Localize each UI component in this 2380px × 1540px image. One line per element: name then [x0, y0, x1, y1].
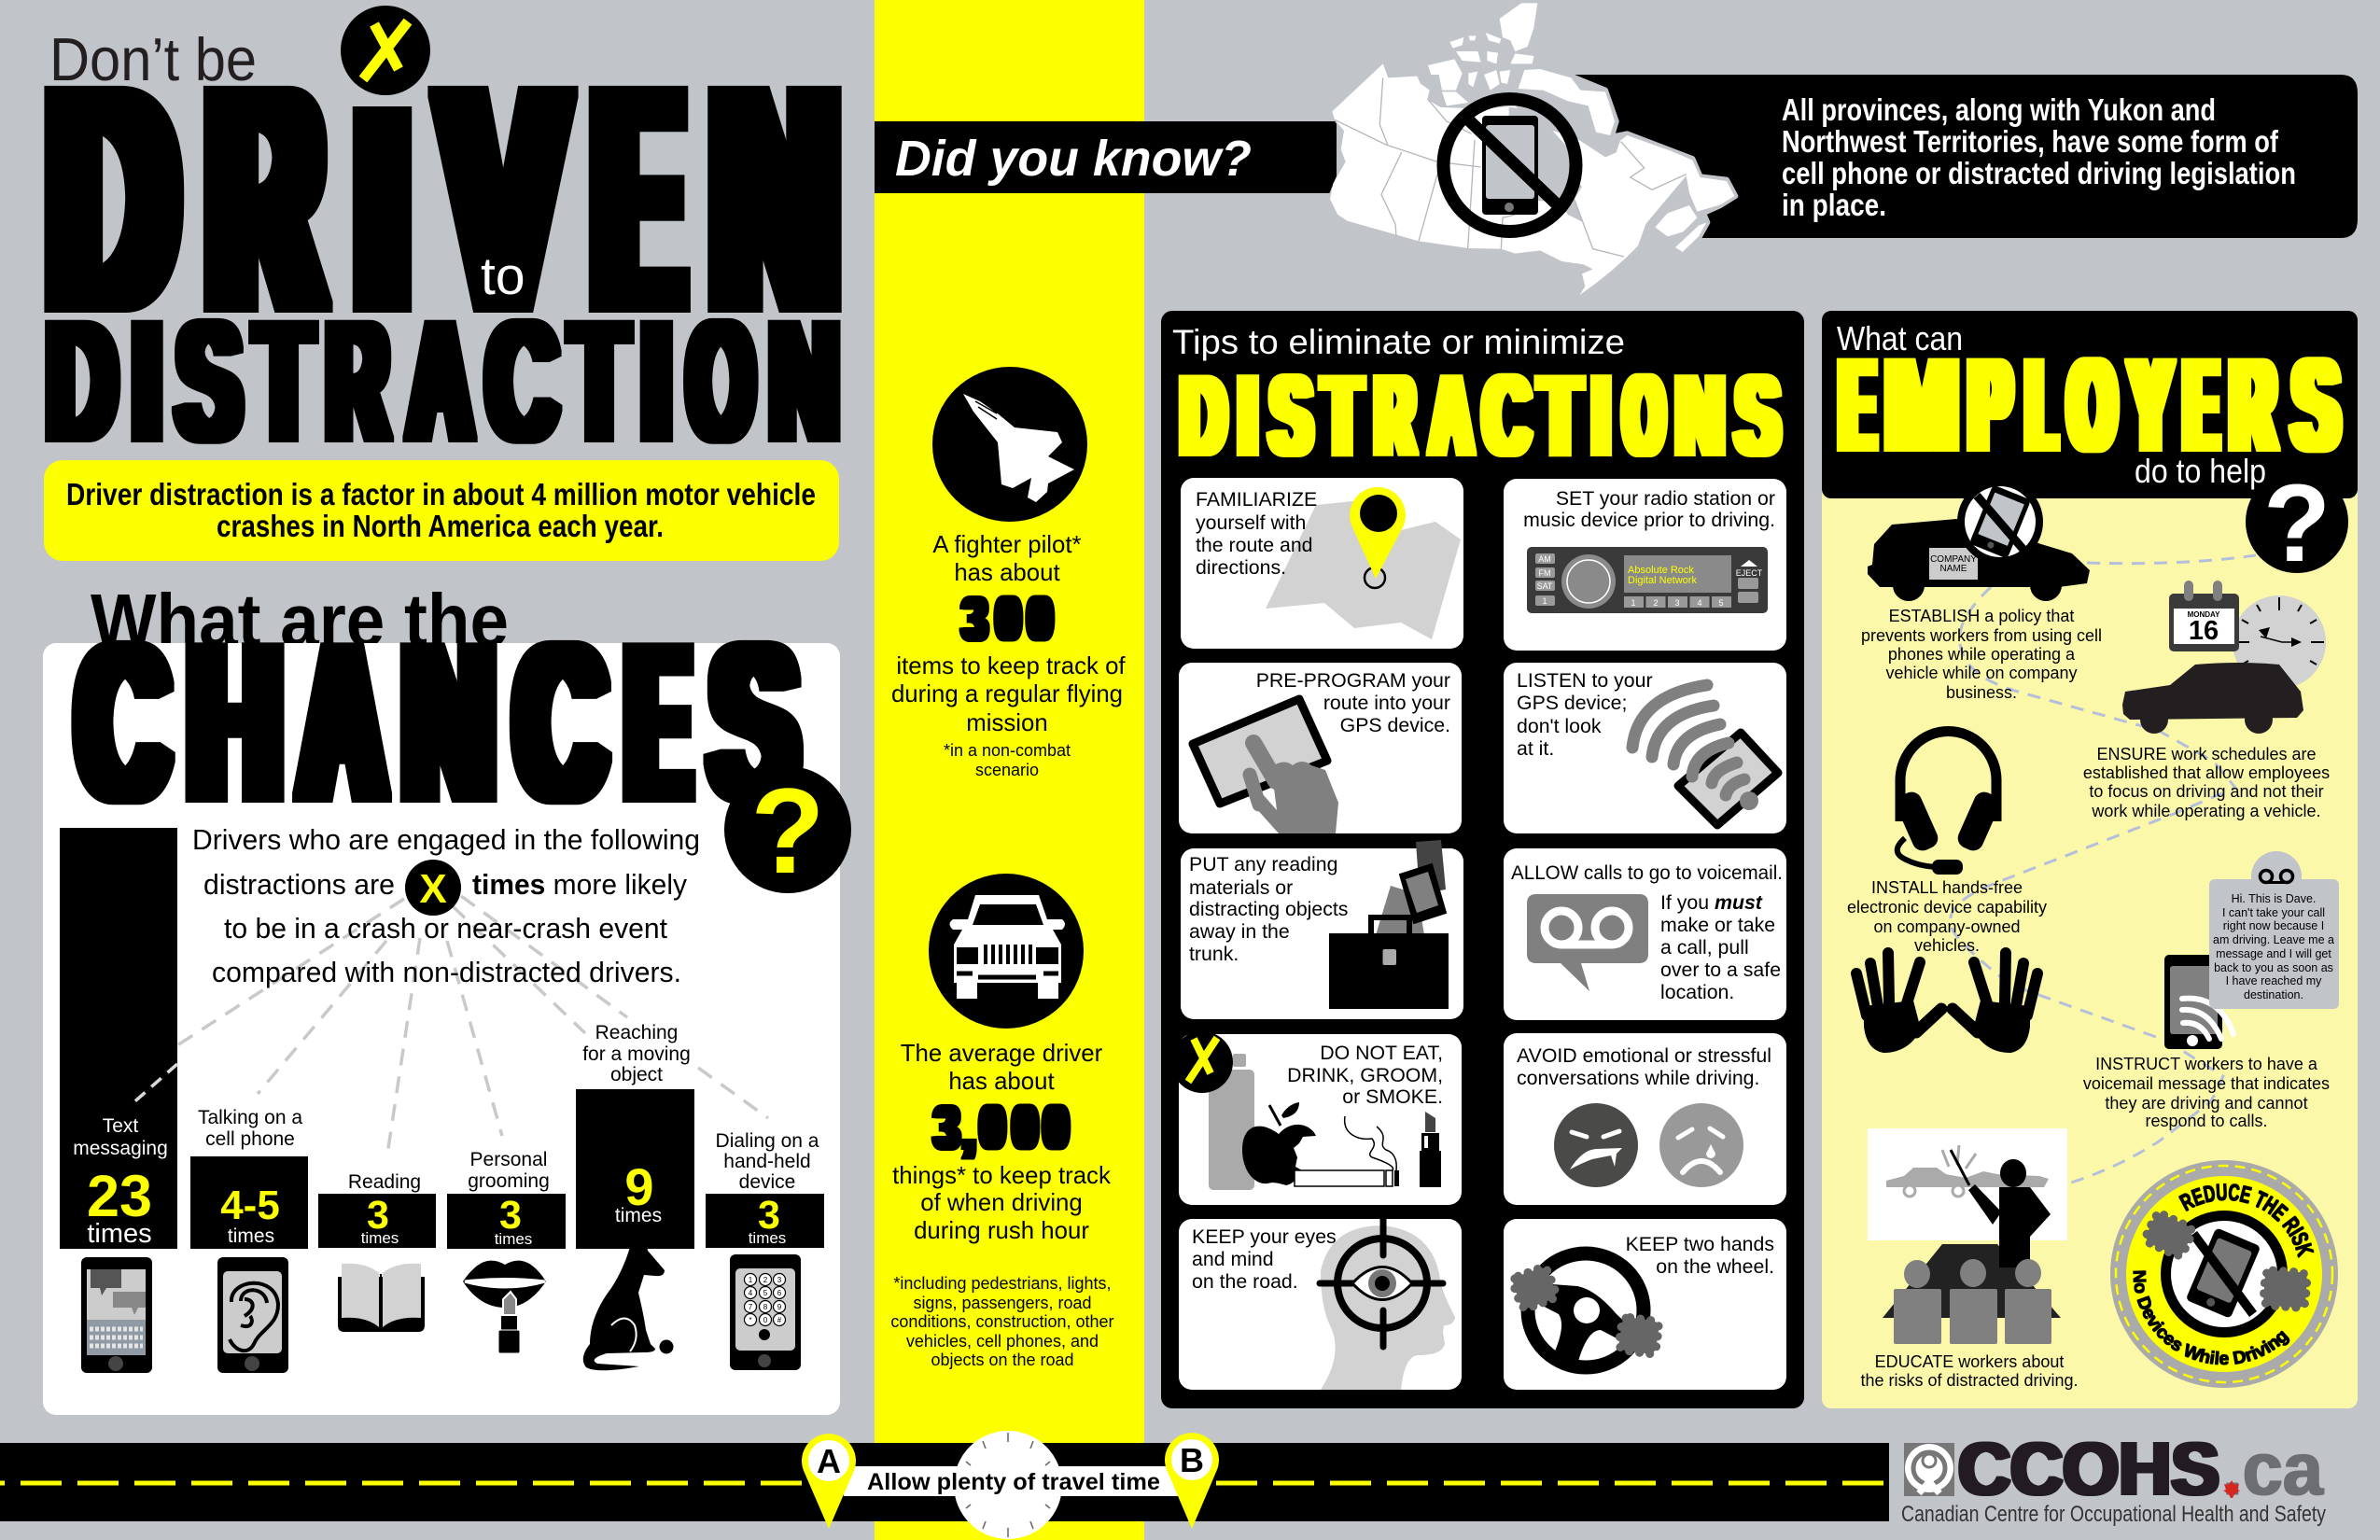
bar: dialing on a hand-held device	[716, 1130, 819, 1247]
icon: question circle: ?	[2263, 462, 2331, 585]
card: put reading materials away: distracting objects	[1189, 898, 1348, 920]
stat: average driver: 3	[934, 1092, 959, 1163]
icon: X multiplier: X	[419, 866, 447, 912]
heading: EMPLOYERS: L	[2028, 331, 2055, 478]
card: keep eyes: and mind	[1192, 1248, 1274, 1270]
title: DISTRACTION: I	[640, 286, 672, 476]
map: Hudson Bay	[1509, 107, 1584, 222]
icon: keypad phone: 0	[763, 1316, 768, 1324]
dashed route	[1951, 555, 2256, 1183]
text: intro paragraph: Drivers who are engaged in the following	[192, 823, 700, 856]
card: pre-program: PRE-PROGRAM your	[1256, 669, 1450, 692]
callout: 4 million crashes	[44, 460, 839, 561]
text: establish: prevents workers from using cell	[1861, 626, 2102, 645]
icon: lipstick	[1420, 1112, 1441, 1187]
title: DISTRACTION: T	[256, 286, 312, 476]
card: avoid emotional: AVOID emotional or stressful	[1517, 1044, 1771, 1067]
card: keep two hands: KEEP two hands	[1626, 1233, 1774, 1255]
banner: did you know	[875, 121, 1337, 193]
text: instruct: they are driving and cannot	[2105, 1094, 2308, 1113]
map: provincial borders	[1335, 77, 1687, 257]
text: install: on company-owned	[1873, 917, 2021, 936]
text: install: INSTALL hands-free	[1871, 878, 2023, 897]
badge: reduce the risk: REDUCE THE RISK	[2178, 1183, 2315, 1258]
bar: reaching for a moving object: 9	[624, 1157, 654, 1216]
icon: question circle	[2246, 462, 2348, 585]
stat: average driver: things* to keep track	[892, 1163, 1111, 1189]
icon: ear phone	[217, 1257, 288, 1373]
voicemail message bubble: right now because I	[2223, 919, 2324, 932]
bar: reaching for a moving object: times	[615, 1205, 662, 1226]
bar: talking on a cell phone	[198, 1107, 302, 1247]
stat: fighter pilot: items to keep track of	[896, 653, 1126, 679]
card: keep eyes: on the road.	[1192, 1270, 1298, 1293]
stat: fighter pilot: during a regular flying	[891, 681, 1123, 707]
card: allow voicemail: ALLOW calls to go to voicemail.	[1511, 862, 1783, 884]
text: instruct: voicemail message that indicates	[2083, 1074, 2330, 1093]
card: do not eat	[1171, 1031, 1462, 1205]
card: pre-program: route into your	[1323, 692, 1450, 714]
icon: X circle	[341, 6, 430, 95]
icon: SUV	[2122, 663, 2303, 734]
title: DRIVEN: R	[210, 24, 319, 374]
banner: did you know: Did you know?	[895, 131, 1252, 187]
map: mainland	[1330, 63, 1734, 295]
bar: reading: 3	[367, 1193, 389, 1238]
icon: car radio: 5	[1718, 598, 1724, 608]
icon: pin A: A	[817, 1442, 841, 1480]
card: pre-program: GPS device.	[1340, 714, 1450, 736]
heading: DISTRACTIONS: D	[1181, 352, 1225, 479]
bar: dialing on a hand-held device: hand-held	[723, 1151, 811, 1172]
card: pre-program	[1179, 663, 1462, 833]
heading: DISTRACTIONS: S	[1270, 352, 1311, 479]
text: ensure: ENSURE work schedules are	[2096, 745, 2317, 763]
text: instruct: INSTRUCT workers to have a	[2095, 1055, 2318, 1073]
stat: average driver: 0	[1013, 1092, 1037, 1163]
bar: reading	[348, 1171, 421, 1247]
icon: lips and lipstick	[463, 1261, 546, 1353]
heading: EMPLOYERS: P	[1969, 331, 2010, 478]
title: Don't be: Don’t be	[49, 25, 257, 93]
card: listen: don't look	[1517, 715, 1602, 737]
stat: fighter pilot: 3	[962, 583, 987, 654]
bar: personal grooming: Personal	[470, 1149, 547, 1170]
bar: dialing on a hand-held device: device	[739, 1171, 795, 1193]
bar: reaching for a moving object: Reaching	[595, 1022, 678, 1043]
title: DISTRACTION: R	[328, 286, 387, 476]
heading: CHANCES: E	[628, 599, 687, 845]
bar: dialing on a hand-held device: times	[749, 1229, 786, 1247]
panel: tips distractions	[1161, 311, 1804, 1408]
icon: hands	[1856, 953, 2037, 1053]
icon: car radio: Absolute Rock	[1628, 565, 1694, 576]
bar: reaching for a moving object: object	[610, 1064, 663, 1085]
title: DISTRACTION: A	[409, 286, 471, 476]
voicemail message bubble: I have reached my	[2226, 974, 2322, 987]
icon: bottle	[1209, 1054, 1254, 1190]
icon: apple	[1242, 1102, 1316, 1185]
icon: keypad phone: 4	[749, 1289, 753, 1297]
text: ensure: to focus on driving and not their	[2089, 782, 2324, 801]
card: familiarize	[1181, 478, 1463, 649]
card: allow voicemail: If you must	[1660, 891, 1763, 914]
icon: steering wheel	[1511, 1253, 1659, 1367]
card: allow voicemail: location.	[1660, 981, 1734, 1003]
title: DRIVEN: D	[49, 24, 175, 374]
badge: reduce the risk	[2110, 1160, 2338, 1388]
title: DRIVEN: I	[357, 24, 407, 374]
bar: talking on a cell phone: 4-5	[220, 1183, 280, 1228]
bar: dialing on a hand-held device: 3	[758, 1193, 780, 1238]
stat: average driver	[890, 874, 1114, 1369]
card: put reading materials away: away in the	[1189, 920, 1290, 943]
bar: personal grooming: grooming	[468, 1170, 550, 1192]
icon: pin B: B	[1180, 1441, 1204, 1479]
I notch cover	[343, 78, 420, 106]
card: avoid emotional: conversations while driving.	[1517, 1067, 1759, 1089]
bar: text messaging: 23	[87, 1164, 152, 1229]
heading: CHANCES: N	[404, 599, 494, 845]
icon: car radio: AM	[1538, 554, 1551, 564]
card: allow voicemail: a call, pull	[1660, 936, 1749, 959]
text: intro paragraph	[192, 823, 700, 988]
card: familiarize: FAMILIARIZE	[1196, 488, 1317, 511]
card: listen: GPS device;	[1517, 692, 1627, 714]
icon: keypad phone: 8	[763, 1303, 768, 1311]
icon: car front	[929, 874, 1084, 1029]
card: do not eat: or SMOKE.	[1342, 1085, 1443, 1108]
card: listen: LISTEN to your	[1517, 669, 1653, 692]
text: ensure	[2083, 745, 2330, 820]
stat: average driver: objects on the road	[931, 1351, 1074, 1369]
icon: calendar	[2169, 581, 2239, 651]
text: intro paragraph: times more likely	[472, 868, 687, 901]
voicemail message bubble: message and I will get	[2216, 947, 2331, 960]
heading: DISTRACTIONS: R	[1376, 352, 1414, 479]
card: put reading materials away	[1181, 840, 1463, 1019]
bar: reading: Reading	[348, 1171, 421, 1193]
icon: car radio: 1	[1631, 598, 1636, 608]
heading: DISTRACTIONS: S	[1736, 352, 1779, 479]
heading: DISTRACTIONS: A	[1431, 352, 1472, 479]
title: DISTRACTION: O	[688, 286, 753, 476]
heading: CHANCES: H	[189, 599, 281, 845]
yellow centre column	[875, 0, 1144, 1540]
title: DISTRACTION: T	[571, 286, 627, 476]
card: put reading materials away: materials or	[1189, 876, 1293, 899]
icon: keypad phone: 3	[777, 1276, 782, 1284]
card: put reading materials away: trunk.	[1189, 943, 1239, 965]
dashed connectors	[177, 896, 768, 1155]
card: familiarize: directions.	[1196, 556, 1286, 579]
icon: question circle: ?	[750, 763, 825, 899]
bar: reaching for a moving object: for a moving	[582, 1043, 691, 1065]
card: allow voicemail: make or take	[1660, 914, 1775, 936]
text: establish	[1861, 607, 2102, 702]
card: avoid emotional	[1504, 1033, 1786, 1205]
heading: CHANCES: C	[517, 599, 604, 845]
text: instruct: respond to calls.	[2145, 1112, 2268, 1130]
icon: maple leaf	[2223, 1480, 2240, 1498]
title: DRIVEN: E	[597, 24, 679, 374]
stat: fighter pilot: scenario	[975, 761, 1039, 779]
text: educate: EDUCATE workers about	[1875, 1352, 2064, 1371]
bar: talking on a cell phone: Talking on a	[198, 1107, 302, 1128]
bar chart	[60, 828, 824, 1249]
text: intro paragraph: distractions are	[203, 868, 395, 901]
bar: reading: times	[361, 1229, 399, 1247]
stat: average driver: during rush hour	[914, 1218, 1089, 1244]
card: allow voicemail	[1504, 848, 1786, 1020]
logo: CCOHS	[1901, 1427, 2326, 1527]
voicemail message bubble: am driving. Leave me a	[2213, 933, 2334, 946]
text: establish: business.	[1946, 683, 2017, 702]
title: DISTRACTION: S	[177, 286, 241, 476]
icon: car radio: 2	[1653, 598, 1659, 608]
callout: 4 million crashes: Driver distraction is a factor in about 4 million motor vehicle	[66, 477, 816, 511]
heading: EMPLOYERS: O	[2069, 331, 2115, 478]
text: ensure: established that allow employees	[2083, 763, 2330, 782]
icon: clock face	[954, 1431, 1062, 1539]
bar: talking on a cell phone: cell phone	[205, 1128, 295, 1150]
icon: pointing hand	[1250, 743, 1338, 833]
voicemail message bubble: Hi. This is Dave.	[2232, 892, 2316, 905]
label band: Allow plenty of travel time	[867, 1469, 1160, 1495]
icon: cigarette	[1295, 1116, 1399, 1186]
text: intro paragraph: compared with non-distracted drivers.	[212, 956, 681, 988]
card: listen	[1504, 663, 1786, 833]
heading: CHANCES: S	[711, 599, 796, 845]
heading: DISTRACTIONS: I	[1592, 352, 1609, 479]
bar: dialing on a hand-held device: Dialing on a	[716, 1130, 819, 1152]
voicemail message bubble: I can't take your call	[2222, 906, 2325, 919]
stat: fighter pilot: 0	[996, 583, 1020, 654]
stat: average driver: ,	[962, 1092, 975, 1163]
header band: What can	[1837, 319, 1963, 357]
text: instruct	[2083, 1055, 2330, 1130]
icon: angry face	[1554, 1103, 1638, 1187]
card: keep eyes: KEEP your eyes	[1192, 1225, 1337, 1248]
callout: 4 million crashes: crashes in North America each year.	[217, 509, 664, 543]
bar: text messaging: Text	[103, 1115, 138, 1137]
card: put reading materials away: PUT any reading	[1189, 853, 1337, 875]
icon: sad face	[1659, 1103, 1743, 1187]
voicemail message bubble	[2209, 851, 2339, 1009]
text: establish: vehicle while on company	[1885, 664, 2078, 682]
stat: average driver: has about	[948, 1069, 1055, 1095]
heading: tips intro: Tips to eliminate or minimize	[1172, 323, 1625, 361]
icon: fighter jet	[932, 367, 1087, 522]
icon: company car with no phone: NAME	[1940, 564, 1967, 574]
icon: calendar: 16	[2189, 616, 2219, 646]
callout: legislation	[1571, 75, 2358, 238]
card: listen: at it.	[1517, 737, 1554, 760]
voicemail message bubble: destination.	[2244, 988, 2303, 1001]
title: DISTRACTION: N	[770, 286, 838, 476]
stat: fighter pilot: 0	[1028, 583, 1052, 654]
text: install: electronic device capability	[1847, 898, 2047, 917]
icon: question circle	[724, 763, 851, 899]
icon: pin B	[1165, 1433, 1219, 1529]
heading: CHANCES: A	[301, 599, 383, 845]
title: DRIVEN: N	[713, 24, 836, 374]
card: do not eat: DRINK, GROOM,	[1287, 1064, 1443, 1086]
icon: keypad phone: 1	[749, 1276, 753, 1284]
stat: fighter pilot	[891, 367, 1126, 779]
stat: average driver: 0	[1043, 1092, 1068, 1163]
badge: reduce the risk: No Devices While Driving	[2133, 1270, 2290, 1365]
icon: car radio: Digital Network	[1628, 575, 1697, 586]
stat: average driver: of when driving	[920, 1190, 1083, 1216]
road: allow plenty of travel time	[0, 1431, 1889, 1539]
icon: classroom	[1868, 1128, 2067, 1344]
heading: DISTRACTIONS: T	[1540, 352, 1581, 479]
map: grey coastal fringe and bays	[1330, 77, 1735, 259]
text: intro paragraph: to be in a crash or near-crash event	[224, 912, 667, 945]
text: establish: ESTABLISH a policy that	[1889, 607, 2074, 625]
icon: pin A	[802, 1434, 856, 1529]
logo: CCOHS: .ca	[2222, 1427, 2323, 1510]
icon: keypad phone: 7	[749, 1303, 753, 1311]
callout: legislation: All provinces, along with Yukon and	[1782, 92, 2216, 127]
icon: keypad phone: 2	[763, 1276, 768, 1284]
bar: personal grooming	[468, 1149, 550, 1248]
icon: clock	[2233, 595, 2326, 689]
logo: CCOHS: CCOHS	[1958, 1427, 2219, 1510]
icon: calendar: MONDAY	[2188, 610, 2220, 619]
stat: average driver: vehicles, cell phones, and	[906, 1332, 1099, 1351]
heading: DISTRACTIONS: O	[1624, 352, 1664, 479]
heading: EMPLOYERS: E	[2186, 331, 2217, 478]
stat: average driver: 0	[980, 1092, 1004, 1163]
stat: average driver: signs, passengers, road	[913, 1294, 1092, 1312]
card: keep two hands: on the wheel.	[1656, 1255, 1774, 1278]
panel: employers	[1822, 311, 2358, 1408]
icon: phone with wifi	[2164, 955, 2233, 1049]
heading: CHANCES: C	[78, 599, 166, 845]
card: set radio: music device prior to driving.	[1523, 509, 1775, 531]
icon: dog	[583, 1233, 674, 1370]
logo mark	[1904, 1443, 1954, 1496]
voicemail message bubble: back to you as soon as	[2214, 961, 2333, 974]
title block	[47, 6, 838, 476]
card: allow voicemail: over to a safe	[1660, 959, 1781, 981]
map: Canada with no-phone sign	[1330, 3, 1735, 295]
icon: no-phone sign	[1443, 99, 1575, 231]
text: ensure: work while operating a vehicle.	[2091, 802, 2321, 820]
bar: personal grooming: times	[495, 1230, 532, 1248]
icon: car radio: SAT	[1537, 581, 1553, 591]
icon: keypad phone: 5	[763, 1289, 768, 1297]
icon: keypad phone: 6	[777, 1289, 782, 1297]
icon: keypad phone: *	[749, 1316, 752, 1324]
stat: fighter pilot: mission	[966, 710, 1048, 736]
icon: headset	[1893, 731, 2003, 875]
bar: text messaging	[73, 1115, 168, 1249]
icon: car radio: 4	[1697, 598, 1702, 608]
icon: car radio: 1	[1542, 596, 1547, 606]
card: familiarize: yourself with	[1196, 511, 1306, 534]
stat: average driver: The average driver	[901, 1041, 1103, 1067]
header band: do to help	[2135, 452, 2266, 490]
bar: talking on a cell phone: times	[228, 1225, 274, 1247]
icon: car radio: FM	[1538, 568, 1551, 578]
icon: eye target	[1320, 1219, 1443, 1347]
text: establish: phones while operating a	[1888, 645, 2076, 664]
icon: car radio	[1527, 547, 1768, 613]
icon: keypad phone: #	[777, 1316, 782, 1324]
icon: X badge	[1171, 1031, 1233, 1093]
bar: text messaging: messaging	[73, 1138, 168, 1159]
icon: text phone	[81, 1257, 152, 1373]
card: do not eat: DO NOT EAT,	[1320, 1042, 1443, 1064]
heading: What are the: What are the	[91, 579, 509, 662]
card: set radio	[1504, 479, 1786, 651]
stat: average driver: *including pedestrians, lights,	[893, 1274, 1112, 1293]
stat: fighter pilot: has about	[954, 560, 1060, 586]
title: DISTRACTION: I	[133, 286, 161, 476]
panel: what are the chances	[43, 599, 851, 1415]
callout: legislation: in place.	[1782, 188, 1886, 222]
heading: DISTRACTIONS: N	[1676, 352, 1724, 479]
bar: reaching for a moving object	[582, 1022, 691, 1226]
card: keep eyes	[1179, 1219, 1462, 1390]
icon: open book	[338, 1264, 425, 1332]
heading: DISTRACTIONS: I	[1239, 352, 1257, 479]
card: familiarize: the route and	[1196, 534, 1313, 556]
map: islands and Maritimes	[1428, 3, 1706, 252]
text: install	[1847, 878, 2047, 955]
icon: car radio: 3	[1674, 598, 1680, 608]
text: educate: the risks of distracted driving.	[1860, 1371, 2079, 1390]
title: to: to	[481, 246, 525, 306]
card: keep two hands	[1504, 1219, 1786, 1390]
stat: average driver: conditions, construction, other	[890, 1312, 1114, 1331]
icon: company car with no phone: COMPANY	[1930, 554, 1977, 565]
icon: keypad phone: 9	[777, 1303, 782, 1311]
title: DRIVEN: V	[443, 24, 564, 374]
text: educate	[1860, 1352, 2079, 1390]
icon: sound waves	[1632, 685, 1744, 795]
heading: DISTRACTIONS: T	[1323, 352, 1361, 479]
text: install: vehicles.	[1914, 936, 1980, 955]
bar: personal grooming: 3	[499, 1193, 522, 1238]
title: DISTRACTION: C	[487, 286, 556, 476]
heading: EMPLOYERS: M	[1885, 331, 1958, 478]
stat: fighter pilot: *in a non-combat	[944, 741, 1071, 760]
icon: car radio: EJECT	[1736, 568, 1763, 578]
icon: voicemail bubble	[1527, 894, 1648, 991]
header band	[1822, 311, 2358, 498]
icon: company car with no phone	[1868, 479, 2090, 601]
heading: EMPLOYERS: E	[1841, 331, 1874, 478]
heading: EMPLOYERS: S	[2293, 331, 2338, 478]
title: DISTRACTION: D	[47, 286, 117, 476]
card: set radio: SET your radio station or	[1556, 487, 1775, 510]
heading: EMPLOYERS: Y	[2131, 331, 2171, 478]
bar: text messaging: times	[87, 1219, 152, 1249]
heading: DISTRACTIONS: C	[1484, 352, 1529, 479]
stat: fighter pilot: A fighter pilot*	[932, 532, 1082, 558]
icon: keypad phone	[730, 1254, 801, 1370]
heading: EMPLOYERS: R	[2231, 331, 2275, 478]
icon: X multiplier	[405, 860, 461, 916]
callout: legislation: Northwest Territories, have some form of	[1782, 124, 2279, 159]
